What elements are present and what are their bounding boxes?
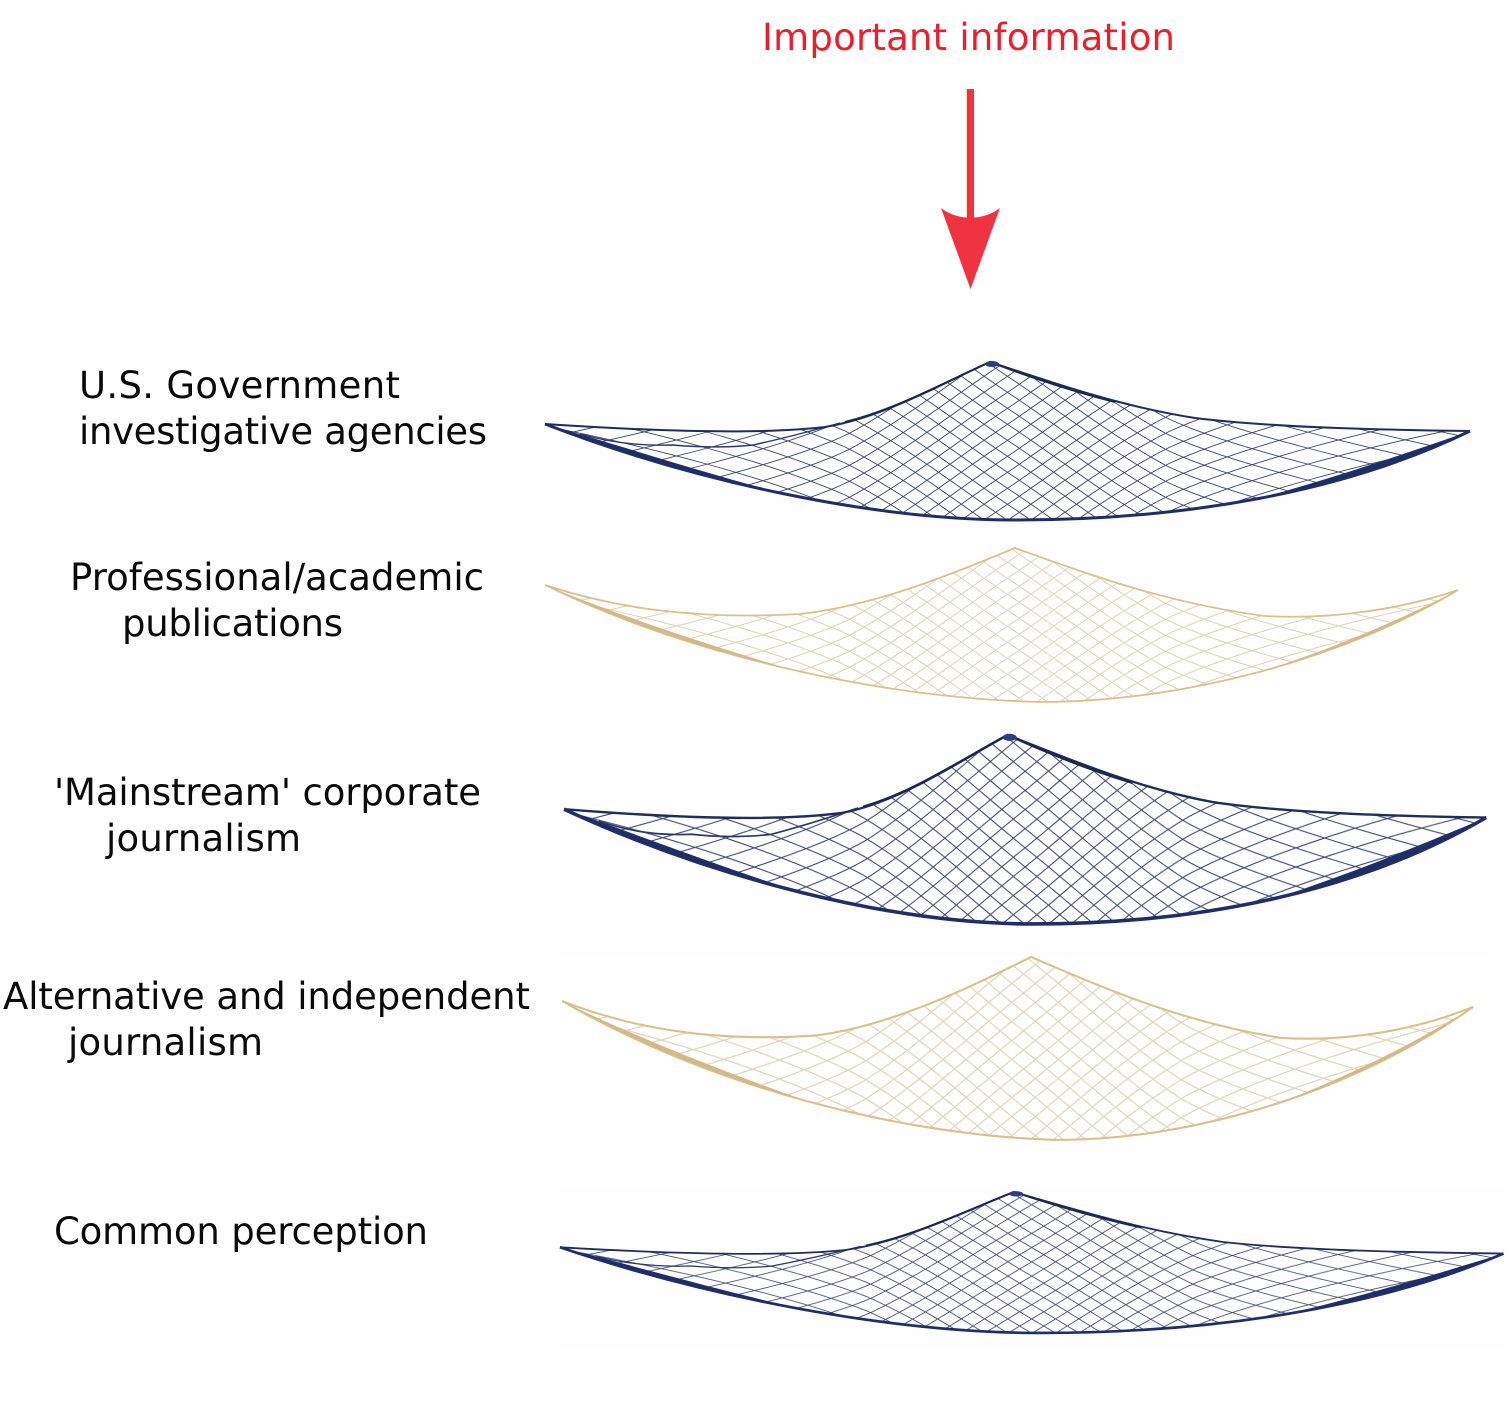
net: tan, second layer: [545, 548, 1458, 702]
label: Common perception: Common perception: [54, 1210, 428, 1253]
net: navy, fifth layer: [557, 1188, 1507, 1348]
net: navy, third layer: [561, 727, 1490, 957]
arrow: pointing down to nets: [941, 89, 1000, 289]
net: navy, first layer: [544, 357, 1472, 547]
label: Professional/academic publications: publications: [122, 602, 343, 645]
label: Mainstream corporate journalism: 'Mainstream' corporate: [54, 771, 481, 814]
label: Mainstream corporate journalism: journalism: [105, 817, 301, 860]
label: Professional/academic publications: [70, 556, 484, 645]
label: U.S. Government investigative agencies: [79, 364, 487, 453]
label: Professional/academic publications: Professional/academic: [70, 556, 484, 599]
label: Alternative and independent journalism: Alternative and independent: [3, 975, 530, 1018]
label: U.S. Government investigative agencies: U.S. Government: [79, 364, 400, 407]
title: Important information: Important information: [762, 16, 1175, 59]
net: tan, fourth layer: [562, 957, 1473, 1140]
label: Mainstream corporate journalism: [54, 771, 481, 860]
label: U.S. Government investigative agencies: investigative agencies: [79, 410, 487, 453]
label: Alternative and independent journalism: [3, 975, 530, 1064]
label: Alternative and independent journalism: journalism: [67, 1021, 263, 1064]
